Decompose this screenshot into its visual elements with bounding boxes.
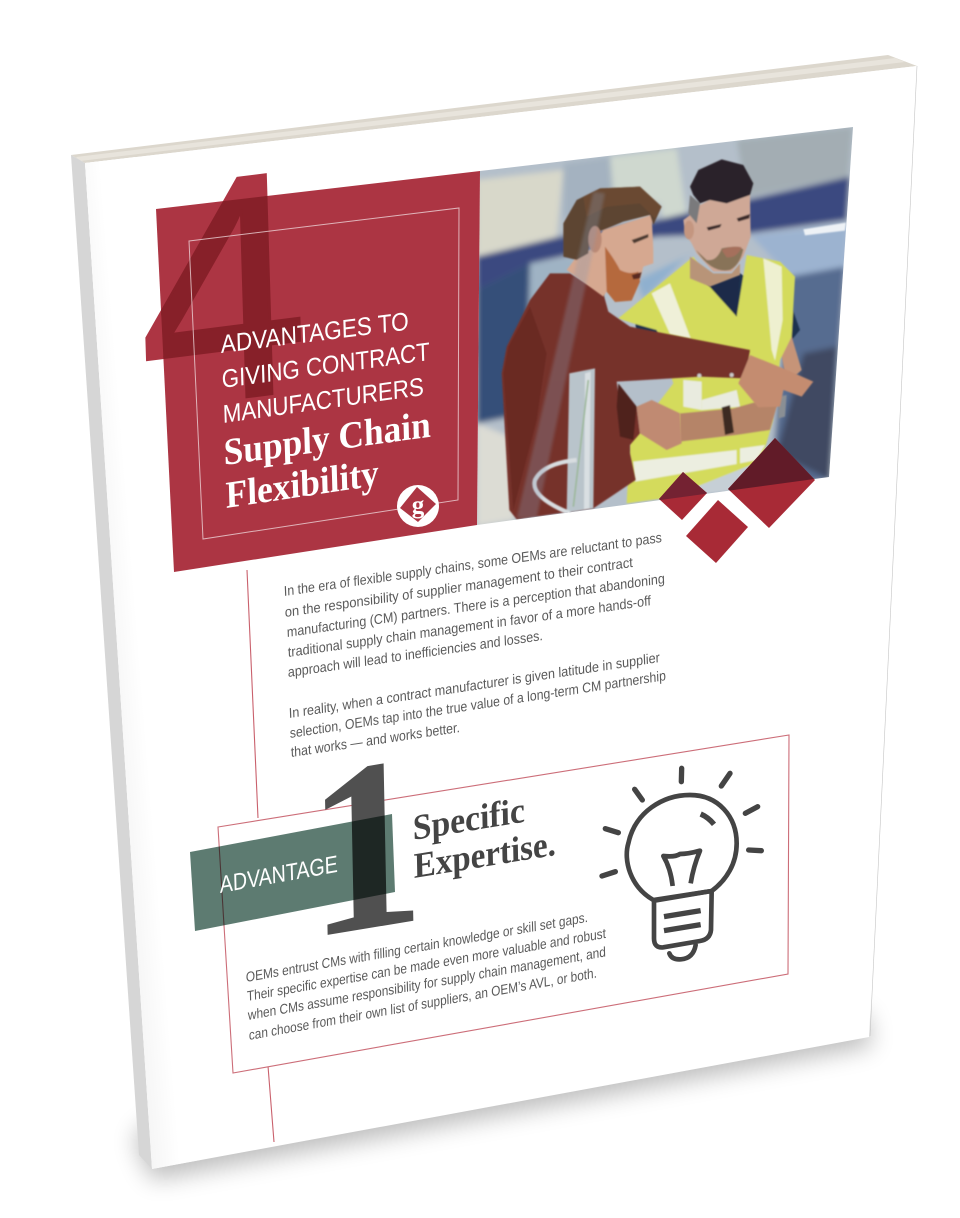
advantage box <box>218 735 789 1073</box>
heading <box>412 790 556 886</box>
big numeral 4: 4 <box>133 101 312 477</box>
logo badge: g <box>412 492 425 519</box>
man 2 head <box>683 159 753 287</box>
book spine <box>71 155 152 1169</box>
decorative diamonds <box>659 438 815 563</box>
big numeral 4: 4 <box>133 101 312 477</box>
title text: Flexibility <box>225 452 379 517</box>
advantage body text: Their specific expertise can be made even more valuable and robust <box>247 925 606 1004</box>
advantage body text <box>246 909 606 1043</box>
book shadow <box>134 1012 872 1180</box>
ribbon label: ADVANTAGE <box>219 851 338 899</box>
title text: ADVANTAGES TO <box>220 308 409 359</box>
photo background <box>477 127 853 525</box>
big numeral 4 <box>145 173 302 398</box>
intro paragraph 1: approach will lead to inefficiencies and losses. <box>287 627 543 680</box>
intro paragraph 1: In the era of flexible supply chains, some OEMs are reluctant to pass <box>283 529 662 599</box>
man 1 head <box>563 187 662 302</box>
intro paragraph 1: manufacturing (CM) partners. There is a perception that abandoning <box>286 570 665 640</box>
man 1 shirt <box>502 273 813 519</box>
advantage body text: can choose from their own list of suppliers, an OEM’s AVL, or both. <box>249 964 597 1043</box>
book cover <box>85 66 917 1169</box>
intro paragraph 2: selection, OEMs tap into the true value of a long-term CM partnership <box>289 667 666 741</box>
intro paragraph 1 <box>283 529 665 680</box>
man 2 forearms <box>680 402 778 442</box>
vertical rule <box>247 570 274 1142</box>
man 1 hands <box>738 355 813 407</box>
heading: Specific <box>412 790 525 848</box>
advantage body text: OEMs entrust CMs with filling certain knowledge or skill set gaps. <box>246 909 588 985</box>
intro paragraph 2 <box>288 649 666 760</box>
red title panel <box>156 171 480 572</box>
advantage body text: when CMs assume responsibility for supply chain management, and <box>247 943 606 1023</box>
advantage ribbon <box>190 814 395 931</box>
title text: Supply Chain <box>223 404 431 474</box>
logo badge <box>397 485 439 527</box>
numeral 1: 1 <box>305 702 426 992</box>
page block top edge <box>71 55 917 163</box>
icon: light bulb <box>602 768 761 959</box>
foreground metal post and tube <box>534 368 595 513</box>
intro paragraph 2: In reality, when a contract manufacturer is given latitude in supplier <box>288 649 660 721</box>
heading: Expertise. <box>413 823 556 886</box>
title text: GIVING CONTRACT <box>221 338 430 394</box>
title inner frame <box>189 208 459 539</box>
intro paragraph 2: that works — and works better. <box>290 719 460 760</box>
intro paragraph 1: on the responsibility of supplier management to their contract <box>284 554 633 620</box>
intro paragraph 1: traditional supply chain management in favor of a more hands-off <box>287 592 651 660</box>
photo: two workers in a factory <box>477 127 853 525</box>
title text: MANUFACTURERS <box>222 373 424 429</box>
panel: advantage 1 <box>190 702 789 1073</box>
title text <box>220 308 431 517</box>
man 2 body <box>618 255 802 503</box>
